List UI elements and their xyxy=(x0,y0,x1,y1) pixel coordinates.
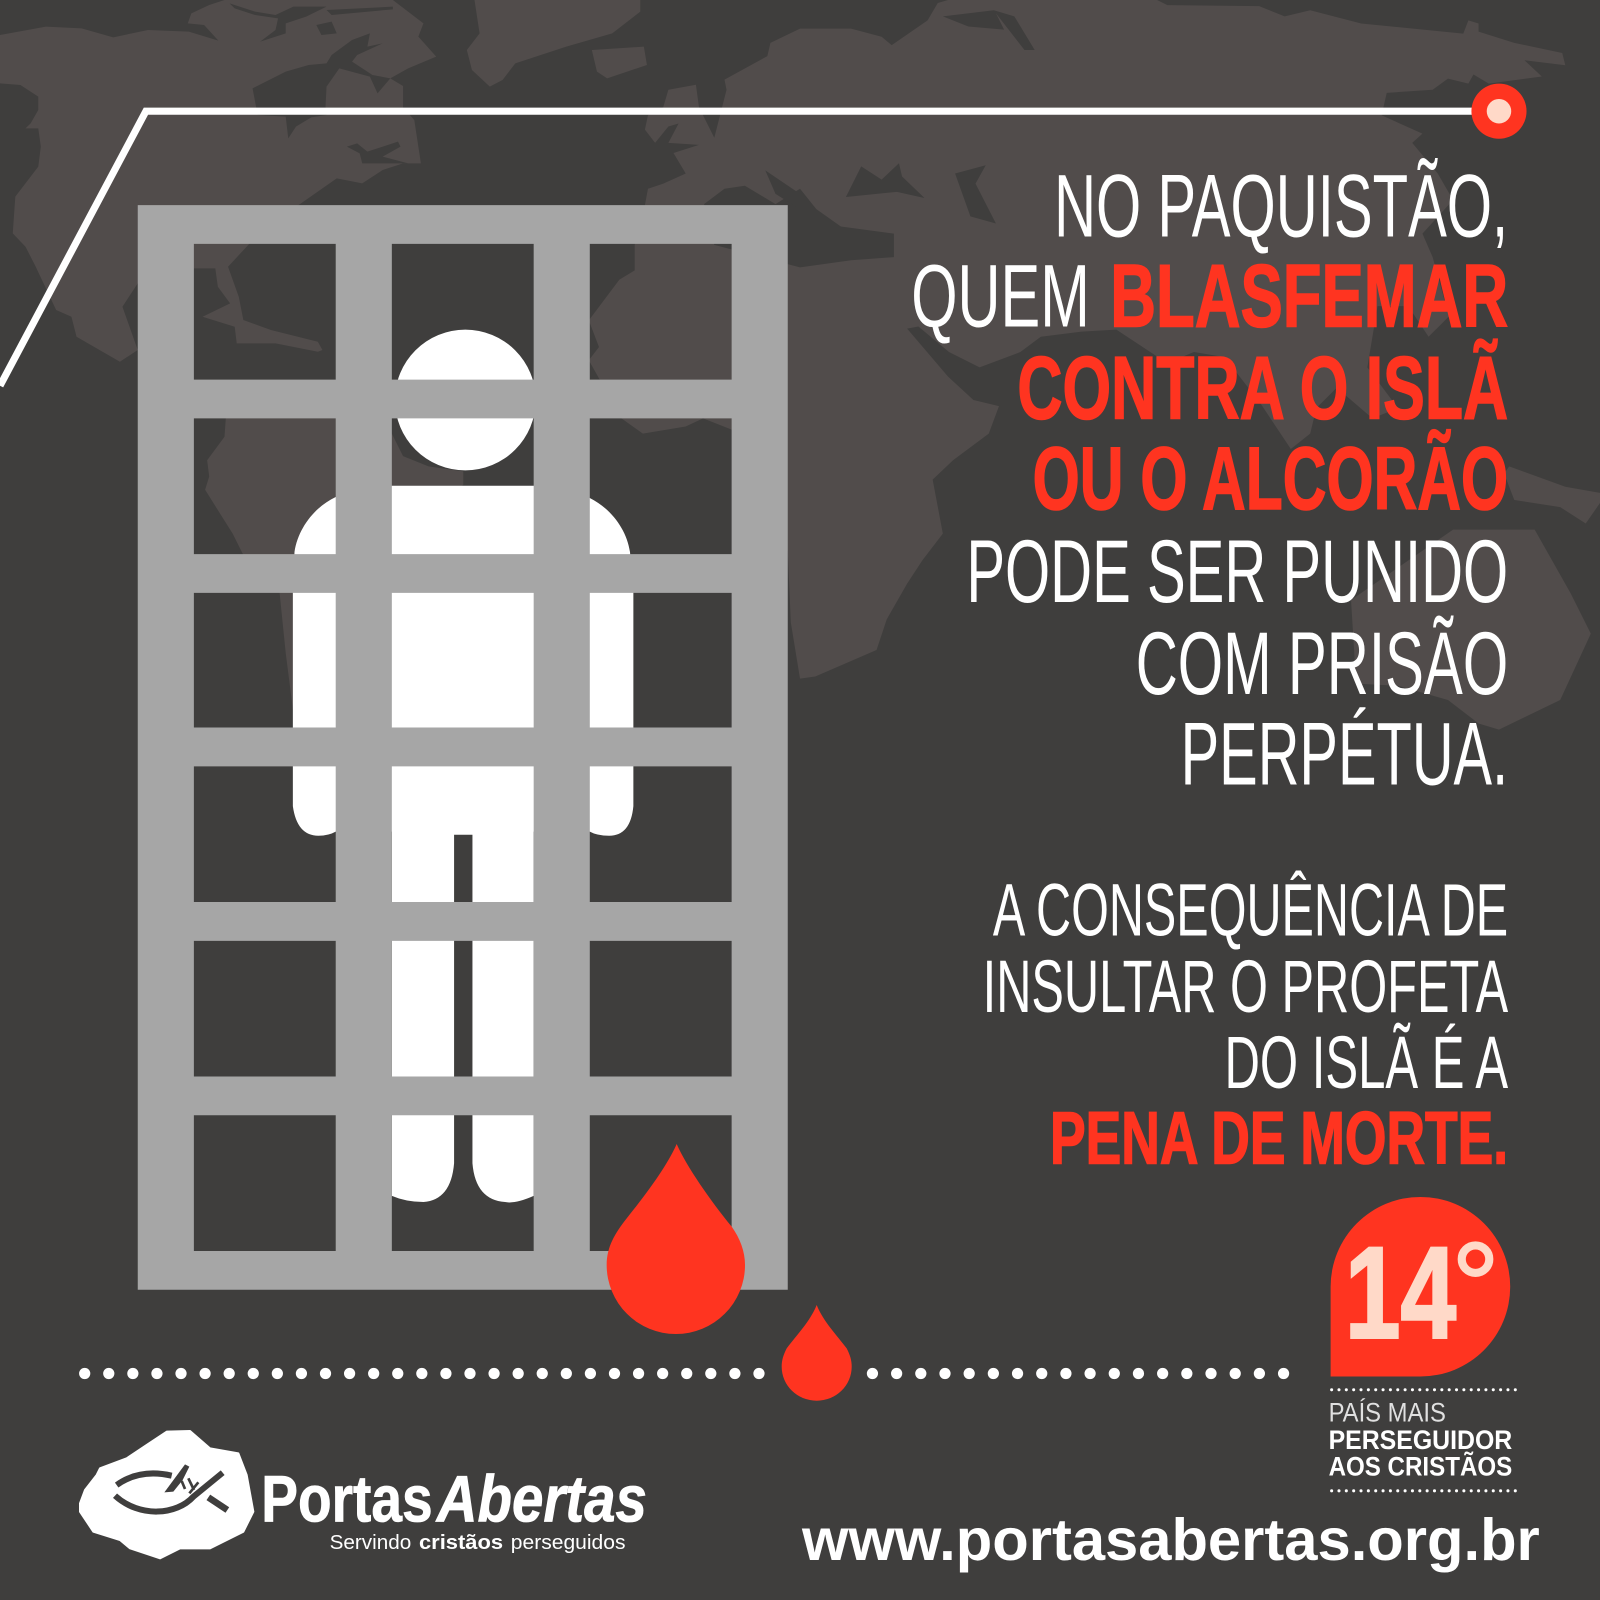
map: South America xyxy=(205,408,463,714)
ranking caption xyxy=(1329,1390,1520,1491)
icon: person figure xyxy=(293,330,633,1202)
website url: www.portasabertas.org.br xyxy=(801,1506,1540,1573)
secondary statement text xyxy=(983,869,1508,1179)
map pin marker xyxy=(1471,84,1527,139)
logo: Portas Abertas: cristãos xyxy=(419,1532,503,1554)
main statement text: QUEM xyxy=(911,247,1090,346)
ranking badge xyxy=(1331,1197,1510,1377)
ranking caption: PAÍS MAIS xyxy=(1329,1397,1446,1427)
dotted line left xyxy=(85,1368,760,1379)
logo: Portas Abertas xyxy=(80,1431,647,1558)
dotted line right xyxy=(872,1368,1285,1379)
map: Eurasia and Africa xyxy=(589,0,1565,679)
map: Americas and Greenland xyxy=(0,0,647,362)
ranking badge: 14 xyxy=(1345,1220,1456,1366)
prison bars cage xyxy=(138,205,788,1290)
icon: stone with fish xyxy=(80,1431,253,1558)
main statement text xyxy=(911,157,1508,804)
world map background xyxy=(0,0,1600,730)
logo: Portas Abertas: perseguidos xyxy=(511,1532,626,1554)
ranking caption: AOS CRISTÃOS xyxy=(1329,1452,1512,1482)
icon: large blood drop xyxy=(607,1144,745,1334)
map: Australia xyxy=(1351,530,1591,730)
icon: small blood drop xyxy=(782,1305,852,1401)
map: inland seas xyxy=(704,10,1035,267)
map: Southeast Asian islands xyxy=(1504,466,1600,523)
ranking caption: PERSEGUIDOR xyxy=(1329,1425,1512,1455)
connector line xyxy=(0,111,1480,386)
logo: Portas Abertas: Abertas xyxy=(435,1462,647,1536)
logo: Portas Abertas: Servindo xyxy=(330,1532,411,1554)
logo: Portas Abertas: Portas xyxy=(261,1462,433,1536)
